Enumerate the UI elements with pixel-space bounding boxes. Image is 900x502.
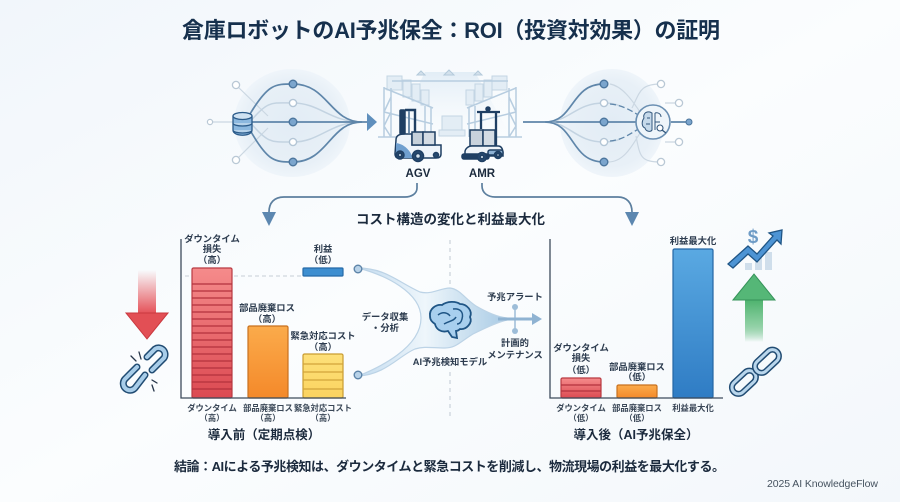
caption: before: 導入前（定期点検） [208,427,320,442]
label: planned maintenance: メンテナンス [487,350,543,360]
bar: profit max [673,249,713,398]
axis labels before: （高） [256,413,280,423]
axis labels after: （低） [625,413,649,423]
label: alert: 予兆アラート [487,291,543,302]
bar labels before: 緊急対応コスト [290,330,356,341]
input node top [354,265,362,273]
panel: before chart [181,233,356,442]
right AI network [523,69,692,177]
icon: broken chain [123,348,165,391]
label: planned maintenance: 計画的 [501,337,529,348]
bar labels before: 部品廃棄ロス [239,302,295,313]
icon: database [233,112,252,135]
axis labels after: 利益最大化 [672,403,714,413]
bar labels after: （低） [623,371,651,382]
bar labels after: 利益最大化 [670,235,717,246]
title: 倉庫ロボットのAI予兆保全：ROI（投資対効果）の証明 [182,18,720,43]
icon: green up arrow [733,274,775,342]
center AI model funnel [354,240,543,420]
bar: emergency cost high [303,354,343,398]
bar labels before: （低） [309,254,337,265]
axis labels after: （低） [569,413,593,423]
left data network [207,69,377,177]
bar labels before: （高） [253,313,281,324]
bar labels after: 部品廃棄ロス [609,361,665,372]
bar labels after: ダウンタイム [553,342,609,353]
bar labels before: ダウンタイム [184,233,240,244]
icon: AMR robot [462,107,503,162]
bar labels before: 利益 [314,243,333,254]
heading: cost structure: コスト構造の変化と利益最大化 [356,211,545,227]
icon: AGV forklift [395,110,441,162]
axis labels before: （高） [200,413,224,423]
panel: after chart [550,235,723,442]
icon: growth arrow with dollar [728,227,782,270]
credit: 2025 AI KnowledgeFlow [767,478,878,490]
bar: parts waste low [617,385,657,398]
bar labels before: 損失 [203,243,222,254]
bar labels after: （低） [567,364,595,375]
label: planned maintenance [487,337,543,360]
bar: downtime loss high [192,268,232,398]
bar labels before: （高） [309,341,337,352]
label: data collection [362,311,409,333]
bar labels before: （高） [198,254,226,265]
conclusion: 結論：AIによる予兆検知は、ダウンタイムと緊急コストを削減し、物流現場の利益を最大化する。 [174,459,725,474]
output arrow [498,318,534,320]
curved arrow: to after chart [482,183,639,226]
axis labels before: （高） [311,413,335,423]
bar: downtime loss low [561,378,601,398]
icon: connected chain [729,347,782,397]
axis labels before: ダウンタイム [187,403,237,413]
axis labels after: ダウンタイム [556,403,606,413]
curved arrow: to before chart [262,183,417,226]
input node bottom [354,371,362,379]
label: AGV: AGV [406,168,431,180]
axis labels before [187,403,352,423]
bar labels after [553,235,717,382]
bar: parts waste high [248,326,288,398]
icon: red down arrow [126,270,168,339]
warehouse scene [378,70,522,138]
bar: profit low [303,268,343,276]
label: AMR: AMR [469,168,496,180]
axis labels after: 部品廃棄ロス [612,403,662,413]
label: data collection: ・分析 [371,322,400,333]
icon: growth arrow with dollar: $ [748,227,759,248]
axis labels before: 部品廃棄ロス [243,403,293,413]
icon: AI brain with magnifier [636,105,670,139]
axis labels before: 緊急対応コスト [294,403,352,413]
label: AI model: AI予兆検知モデル [413,356,487,367]
caption: after: 導入後（AI予兆保全） [573,427,699,442]
icon: brain [430,302,471,338]
bar labels after: 損失 [572,352,591,363]
axis labels after [556,403,714,423]
bar labels before [184,233,356,352]
label: data collection: データ収集 [362,311,409,322]
